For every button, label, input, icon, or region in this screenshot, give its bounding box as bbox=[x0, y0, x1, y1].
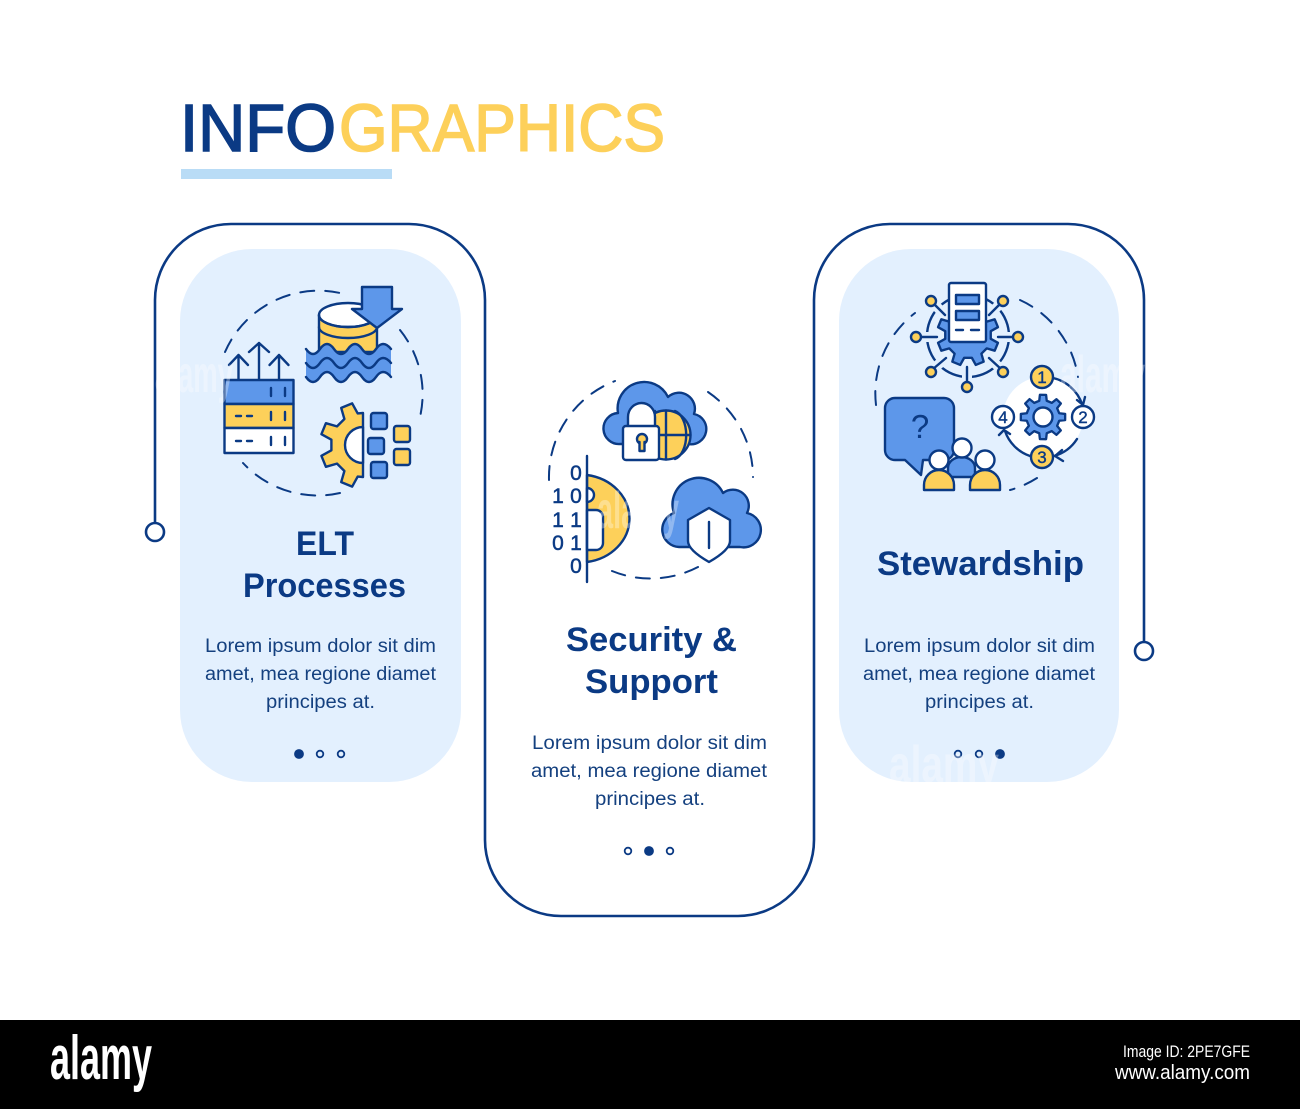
text block: left description: amet, mea regione diamet bbox=[205, 664, 437, 685]
icon: four-step cycle bbox=[992, 366, 1094, 468]
icon: cloud with lock and globe bbox=[603, 382, 706, 460]
icon: team of people bbox=[924, 438, 1000, 490]
icon: four-step cycle: 4 bbox=[998, 408, 1008, 427]
icon: four-step cycle: 1 bbox=[1037, 368, 1047, 387]
icon: binary fingerprint: 1 bbox=[570, 509, 582, 532]
footer url: www.alamy.com bbox=[1114, 1062, 1250, 1084]
title: INFO bbox=[180, 91, 336, 166]
icon: binary fingerprint: 1 bbox=[570, 532, 582, 555]
footer image id: Image ID: 2PE7GFE bbox=[1123, 1042, 1250, 1061]
watermark: alamy bbox=[597, 482, 679, 540]
heading: Security & Support: Security & bbox=[566, 621, 737, 659]
watermark: alamy bbox=[889, 736, 999, 794]
icon: down arrow bbox=[352, 287, 402, 328]
text block: left description: principes at. bbox=[266, 692, 375, 713]
text block: middle description: amet, mea regione diamet bbox=[531, 761, 768, 782]
footer bar bbox=[0, 1020, 1300, 1109]
text block: left description: Lorem ipsum dolor sit dim bbox=[205, 636, 436, 657]
icon: binary fingerprint bbox=[552, 456, 629, 582]
icon: binary fingerprint: 1 bbox=[552, 485, 564, 508]
connecting outline bbox=[146, 224, 1153, 916]
pagination dots: middle bbox=[625, 847, 673, 855]
panel: right background bbox=[839, 249, 1119, 782]
icon: binary fingerprint: 1 bbox=[552, 509, 564, 532]
text block: right description: principes at. bbox=[925, 692, 1034, 713]
icon: question bubble: ? bbox=[911, 408, 929, 445]
icon: waves bbox=[306, 344, 391, 383]
icon: binary fingerprint: 0 bbox=[570, 462, 582, 485]
heading: Stewardship: Stewardship bbox=[877, 545, 1084, 583]
title bbox=[180, 91, 665, 179]
watermark: alamy bbox=[1060, 346, 1145, 404]
heading: ELT Processes: Processes bbox=[243, 567, 406, 605]
icon: half gear bbox=[321, 403, 363, 487]
icon: data hub bbox=[911, 283, 1023, 392]
icon: four-step cycle: 3 bbox=[1037, 448, 1047, 467]
text block: middle description bbox=[531, 733, 768, 810]
icon: cloud with shield bbox=[662, 478, 761, 562]
icon: binary fingerprint: 0 bbox=[552, 532, 564, 555]
icon: stewardship bbox=[875, 283, 1094, 490]
icon: question bubble bbox=[885, 398, 954, 475]
heading: ELT Processes bbox=[243, 525, 406, 605]
heading: Security & Support: Support bbox=[585, 663, 718, 701]
heading: ELT Processes: ELT bbox=[296, 525, 354, 563]
icon: data lake cylinder bbox=[319, 303, 377, 352]
watermark bbox=[155, 346, 1145, 794]
icon: data table bbox=[224, 380, 294, 453]
text block: right description: amet, mea regione diamet bbox=[863, 664, 1096, 685]
icon: ELT processes bbox=[224, 287, 423, 495]
watermark: alamy bbox=[155, 346, 233, 404]
title: GRAPHICS bbox=[339, 91, 665, 166]
pagination dots: right bbox=[955, 750, 1004, 758]
panel: left background bbox=[180, 249, 461, 782]
icon: security and support bbox=[549, 381, 761, 582]
text block: middle description: Lorem ipsum dolor sit dim bbox=[532, 733, 767, 754]
icon: binary fingerprint: 0 bbox=[570, 555, 582, 578]
text block: right description bbox=[863, 636, 1096, 713]
heading: Security & Support bbox=[566, 621, 737, 701]
icon: four-step cycle: 2 bbox=[1078, 408, 1088, 427]
text block: right description: Lorem ipsum dolor sit dim bbox=[864, 636, 1095, 657]
icon: upload arrows bbox=[229, 343, 288, 380]
text block: middle description: principes at. bbox=[595, 789, 705, 810]
pagination dots: left bbox=[295, 750, 344, 758]
text block: left description bbox=[205, 636, 437, 713]
icon: binary fingerprint: 0 bbox=[570, 485, 582, 508]
footer logo: alamy bbox=[50, 1024, 152, 1093]
icon: data squares bbox=[368, 413, 410, 478]
